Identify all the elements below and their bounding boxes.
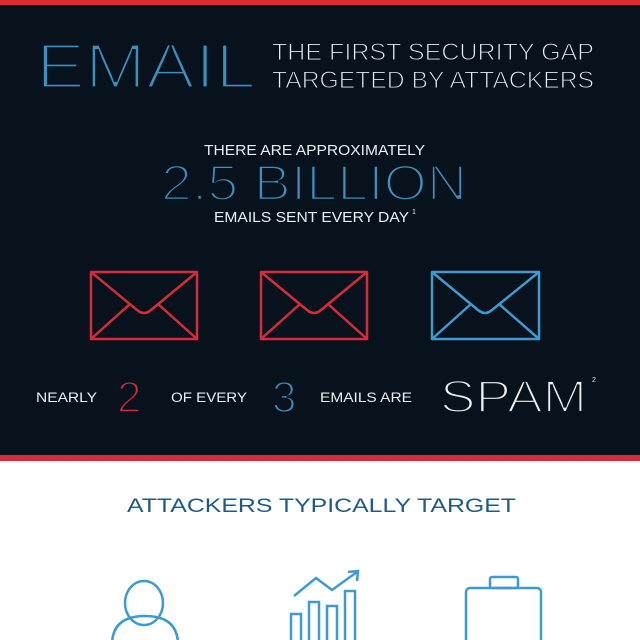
stat: 2 of every 3 spam: EMAILS ARE xyxy=(320,390,412,405)
icon: envelope blue xyxy=(432,272,539,339)
stat: 2 of every 3 spam: 2 xyxy=(592,377,596,384)
stat: 2.5 billion xyxy=(161,143,467,226)
stat: 2.5 billion: THERE ARE APPROXIMATELY xyxy=(204,143,425,159)
subtitle: TARGETED BY ATTACKERS xyxy=(272,67,594,94)
stat: 2 of every 3 spam: 2 xyxy=(117,373,141,422)
icon: envelope red 2 xyxy=(261,272,367,339)
icon: envelope red 1 xyxy=(91,272,197,339)
stat: 2.5 billion: 2.5 BILLION xyxy=(161,155,467,211)
stat: 2.5 billion: EMAILS SENT EVERY DAY xyxy=(214,210,409,226)
stat: 2 of every 3 spam: NEARLY xyxy=(36,390,97,405)
title: EMAIL: EMAIL xyxy=(36,30,256,102)
stat: 2 of every 3 spam xyxy=(36,371,596,422)
subtitle xyxy=(272,39,594,94)
stat: 2 of every 3 spam: SPAM xyxy=(440,371,587,422)
subtitle: THE FIRST SECURITY GAP xyxy=(272,39,594,66)
heading: attackers typically target: ATTACKERS TYPICALLY TARGET xyxy=(127,495,516,517)
stat: 2 of every 3 spam: 3 xyxy=(272,373,296,422)
icon: person xyxy=(112,581,178,640)
dark panel xyxy=(0,0,640,461)
icon: growth chart xyxy=(291,571,358,640)
stat: 2 of every 3 spam: OF EVERY xyxy=(171,390,247,405)
stat: 2.5 billion: 1 xyxy=(412,209,416,216)
icon: briefcase xyxy=(466,577,541,640)
